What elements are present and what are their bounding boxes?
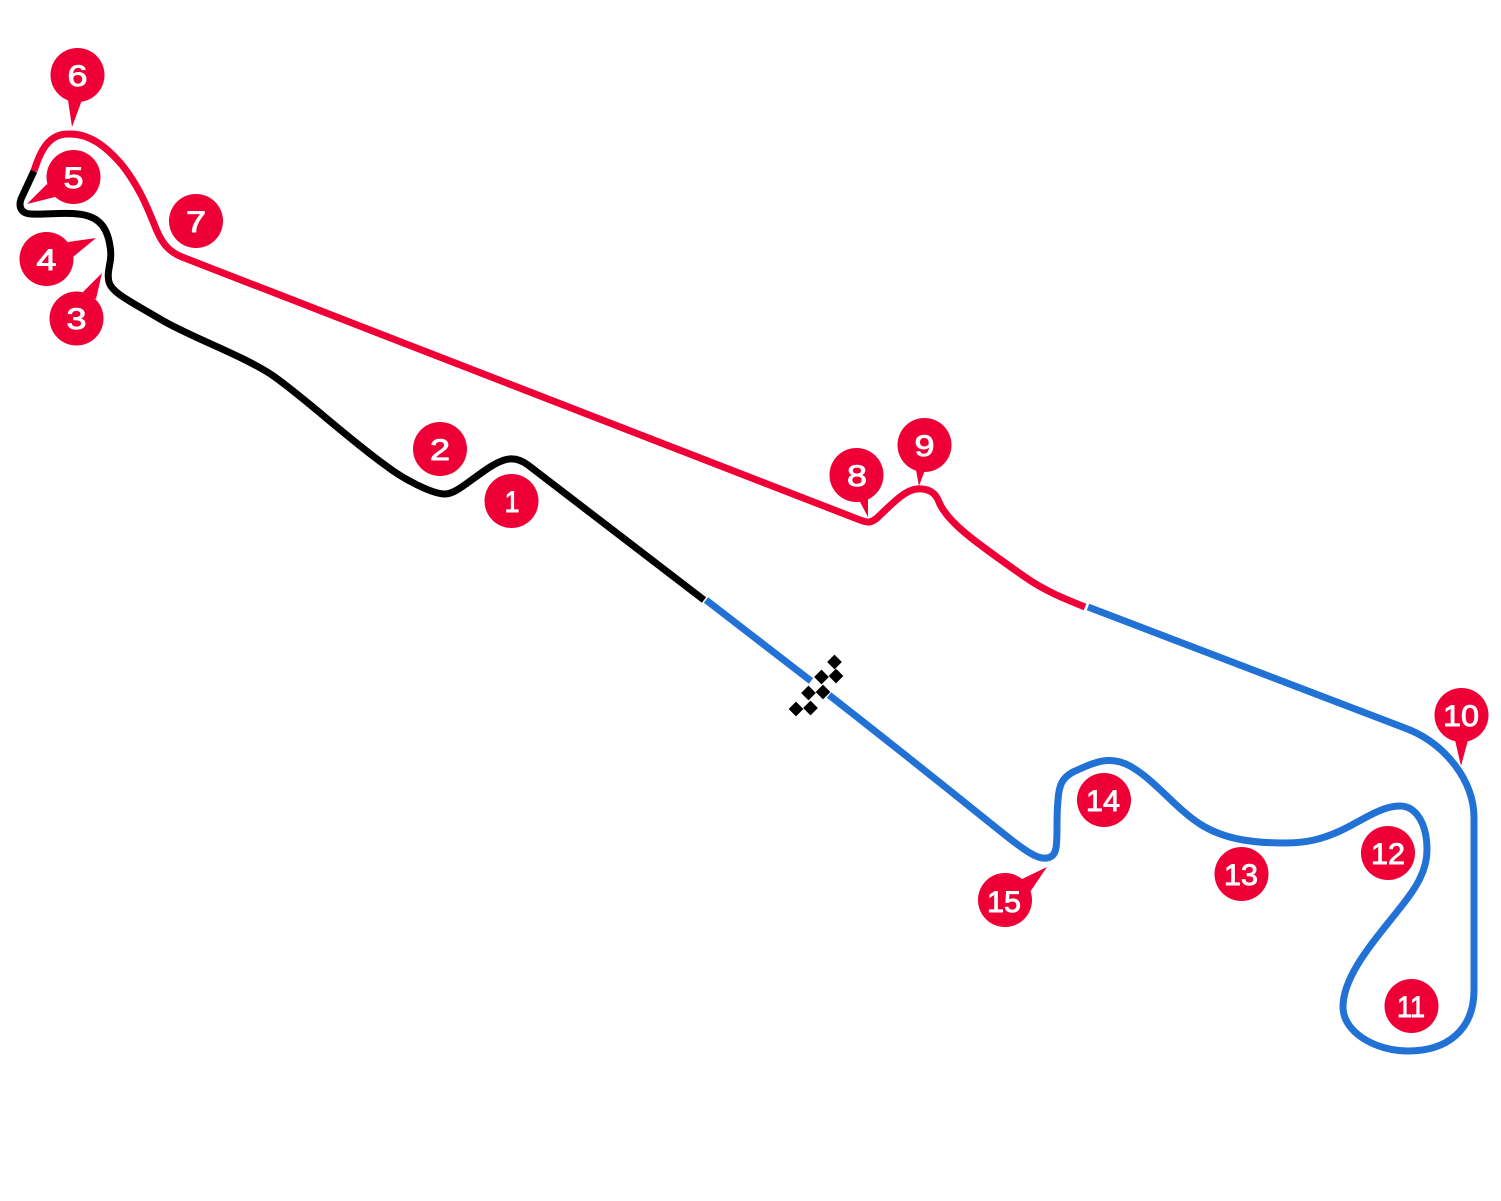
turn marker 2 [413,422,467,476]
track sector 1: black [20,171,704,600]
turn marker 13: 13 [1224,859,1258,892]
icon: chequered start finish flag [789,655,843,716]
turn marker 3: 3 [66,303,86,336]
turn marker 12 [1361,826,1415,880]
turn marker 7: 7 [186,206,206,239]
turn marker 4 [20,232,96,286]
turn marker 8: 8 [847,460,867,493]
turn marker 14: 14 [1086,785,1120,818]
track sector 3: blue lead-in to sector 1 [706,600,811,681]
track sector 3: blue [829,607,1474,1051]
turn marker 15 [978,867,1047,927]
turn marker 2: 2 [430,434,450,467]
turn marker 10: 10 [1443,700,1479,733]
turn marker 15: 15 [987,886,1021,919]
turn marker 11 [1384,979,1438,1033]
turn marker 8 [830,448,884,517]
turn marker 7 [169,194,223,248]
turn marker 5: 5 [64,162,84,195]
turn marker 12: 12 [1371,838,1405,871]
turn marker 10 [1434,688,1488,766]
turn marker 9 [898,418,952,486]
turn marker 5 [27,150,100,204]
turn marker 13 [1214,847,1268,901]
turn marker 9: 9 [914,430,934,463]
turn marker 3 [50,273,104,346]
turn marker 6 [50,48,104,127]
turn marker 11: 11 [1397,991,1425,1024]
turn marker 1 [484,474,538,528]
turn marker 14 [1077,773,1131,827]
turn marker 4: 4 [36,244,56,277]
turn marker 6: 6 [68,60,88,93]
turn marker 1: 1 [504,486,520,519]
track sector 2: red [34,134,1085,607]
